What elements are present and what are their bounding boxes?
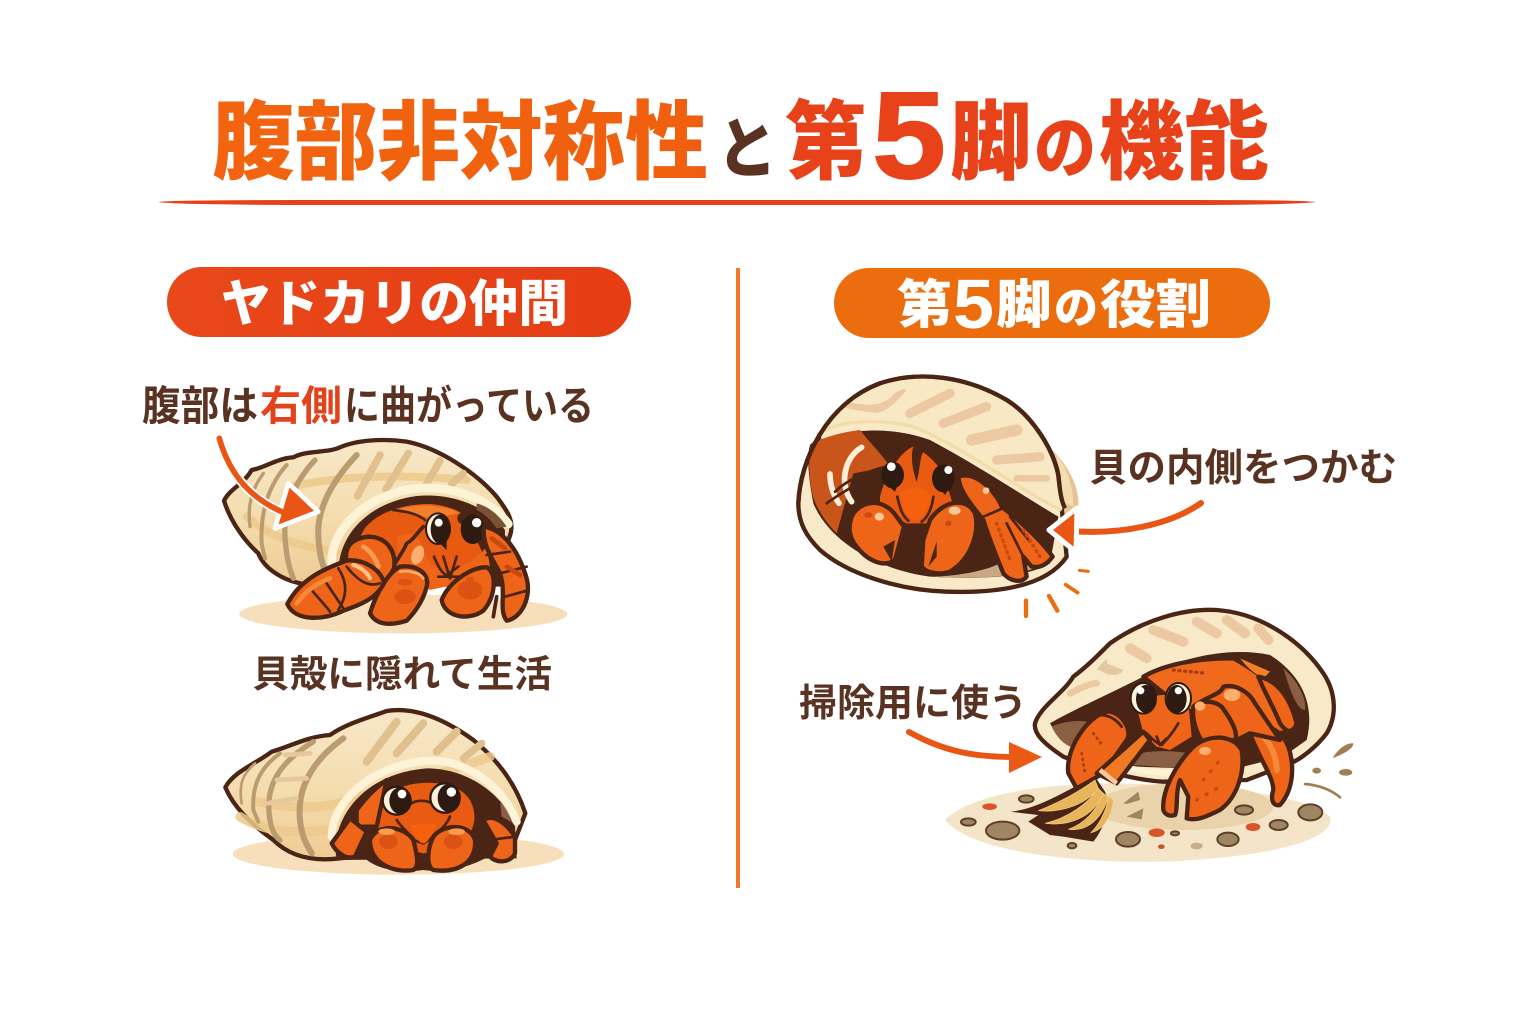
label: 貝殻に隠れて生活: 貝殻に隠れて生活: [252, 653, 552, 695]
label: 掃除用に使う: 掃除用に使う: [799, 683, 1027, 725]
arrow: points to gripping leg: [1049, 503, 1201, 552]
sand: [945, 783, 1331, 862]
vertical divider: [736, 268, 740, 888]
title underline: [158, 200, 1316, 205]
heading pill: 第5脚の役割: 脚: [996, 277, 1052, 335]
title: 5: [872, 67, 946, 205]
left leg: [332, 818, 367, 858]
shell body: [798, 377, 1067, 592]
shell: [225, 710, 525, 859]
label: 貝の内側をつかむ: 貝の内側をつかむ: [1089, 447, 1397, 490]
back of shell: [1043, 443, 1078, 557]
title: と: [717, 112, 777, 186]
curled abdomen (tail): [287, 560, 384, 618]
impact ticks: [1026, 570, 1088, 616]
lower lip shading: [930, 563, 1040, 578]
heading pill: ヤドカリの仲間: [167, 267, 631, 337]
head: [376, 783, 474, 853]
legs gripping: [958, 475, 1053, 581]
shell lip: [332, 761, 517, 837]
arrow: points to brush leg: [909, 732, 1042, 773]
brush leg: [1010, 732, 1150, 842]
label: 腹部は右側に曲がっている: 腹部は: [142, 383, 258, 429]
right claw: [442, 567, 494, 617]
crab back legs: [1143, 658, 1297, 737]
hermit crab illustration: cleaning with brush leg: [945, 610, 1353, 862]
hermit crab illustration: abdomen curved: [219, 438, 567, 633]
face: [397, 533, 492, 590]
carapace: [355, 502, 487, 583]
shell interior: [808, 431, 1058, 578]
right legs: [484, 527, 528, 621]
debris: [1305, 743, 1353, 797]
left claw: [850, 503, 904, 563]
upper arm: [1193, 686, 1280, 743]
title: 腹部非対称性: [212, 95, 708, 191]
sand: [239, 595, 567, 633]
label: 腹部は右側に曲がっている: [142, 383, 594, 429]
left arm: [1068, 712, 1128, 788]
shell interior: [1050, 652, 1309, 770]
shell lid: [798, 377, 1065, 510]
shell lip: [332, 488, 508, 563]
eyes: [383, 783, 460, 815]
title: 脚: [950, 95, 1032, 191]
panel: left ヤドカリの仲間: [142, 267, 631, 875]
eyes: [426, 513, 485, 550]
big claw: [1163, 738, 1242, 819]
heading pill: 第5脚の役割: の: [1054, 284, 1098, 333]
heading pill: ヤドカリの仲間: ヤドカリの仲間: [221, 276, 568, 332]
antenna: [827, 467, 883, 503]
left claw: [370, 828, 417, 871]
label: 腹部は右側に曲がっている: 右側: [260, 383, 342, 429]
title: [212, 67, 1269, 205]
body and face: [880, 447, 953, 523]
hermit crab illustration: hiding in shell: [225, 710, 564, 875]
shell interior: [335, 768, 517, 860]
panel: right 第5脚の役割: [798, 265, 1397, 862]
left claw: [370, 566, 427, 624]
hermit crab illustration: gripping inside of shell: [798, 377, 1088, 616]
shell: [1035, 610, 1334, 782]
right claw: [428, 827, 475, 871]
face lines: [397, 801, 450, 843]
arrow: points to shell: [219, 438, 318, 528]
antenna: [393, 527, 423, 567]
heading pill: 第5脚の役割: 第: [897, 277, 952, 335]
sand: [233, 833, 564, 875]
heading pill: 第5脚の役割: [834, 265, 1270, 343]
right claw: [922, 503, 976, 573]
motion arcs: [830, 447, 862, 503]
right leg: [483, 818, 515, 861]
heading pill: 第5脚の役割: 5: [953, 265, 994, 343]
pebbles: [961, 792, 1322, 849]
eyes: [1131, 683, 1191, 714]
dark shadow under claws: [360, 840, 493, 871]
shell: [224, 440, 511, 584]
title: 第: [785, 95, 867, 191]
head: [1137, 695, 1192, 750]
heading pill: 第5脚の役割: 役割: [1100, 277, 1211, 335]
title: の: [1034, 111, 1096, 187]
shell interior: [338, 496, 505, 587]
title: 機能: [1099, 95, 1269, 191]
eyes: [881, 462, 955, 495]
left arm: [346, 537, 394, 587]
right walking leg: [1250, 726, 1292, 805]
label: 腹部は右側に曲がっている: に曲がっている: [344, 383, 594, 429]
